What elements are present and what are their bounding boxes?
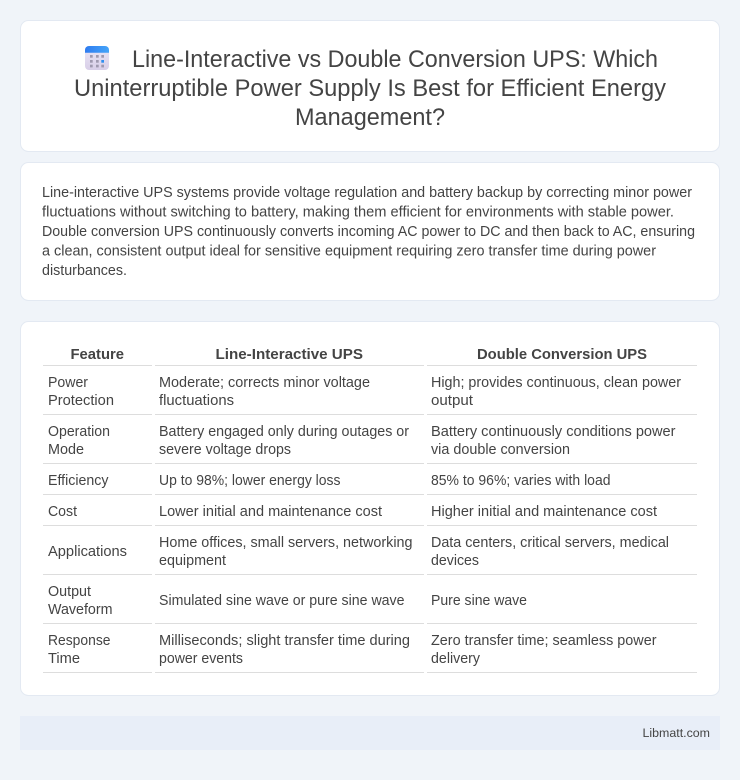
table header: Line-Interactive UPS bbox=[216, 347, 363, 363]
row: operation mode: severe voltage drops bbox=[159, 442, 291, 458]
row: response time: power events bbox=[159, 651, 243, 667]
row: applications: equipment bbox=[159, 553, 226, 569]
table header: Feature bbox=[70, 347, 124, 363]
row: efficiency: Up to 98%; lower energy loss bbox=[159, 473, 340, 489]
row: cost: Lower initial and maintenance cost bbox=[159, 504, 382, 520]
row: operation mode: Battery engaged only during outages or bbox=[159, 424, 409, 440]
text block: summary: Double conversion UPS continuously converts incoming AC power to DC and then back to AC, ensuring bbox=[42, 224, 695, 240]
row: applications bbox=[48, 535, 669, 569]
row: power protection: output bbox=[431, 393, 473, 409]
row: operation mode: Operation bbox=[48, 424, 110, 440]
row: applications: devices bbox=[431, 553, 479, 569]
panel: comparison table bbox=[20, 322, 720, 696]
row: operation mode bbox=[48, 424, 676, 458]
table header bbox=[70, 347, 647, 363]
row: operation mode: Battery continuously conditions power bbox=[431, 424, 676, 440]
row: output waveform: Waveform bbox=[48, 602, 112, 618]
row: cost: Higher initial and maintenance cost bbox=[431, 504, 657, 520]
row: response time: Milliseconds; slight transfer time during bbox=[159, 633, 410, 649]
row: operation mode: via double conversion bbox=[431, 442, 570, 458]
row: output waveform: Pure sine wave bbox=[431, 593, 527, 609]
text block: summary: disturbances. bbox=[42, 263, 127, 279]
row: cost: Cost bbox=[48, 504, 77, 520]
row: power protection bbox=[48, 375, 681, 409]
row: response time bbox=[48, 633, 657, 667]
row: efficiency: 85% to 96%; varies with load bbox=[431, 473, 610, 489]
row: power protection: High; provides continuous, clean power bbox=[431, 375, 681, 391]
text block: summary: Line-interactive UPS systems provide voltage regulation and battery backup by correcting minor power bbox=[42, 185, 692, 201]
row: power protection: fluctuations bbox=[159, 393, 234, 409]
footer bbox=[20, 716, 720, 750]
row: applications: Data centers, critical servers, medical bbox=[431, 535, 669, 551]
row: operation mode: Mode bbox=[48, 442, 84, 458]
footer: Libmatt.com bbox=[642, 726, 710, 740]
row: response time: Time bbox=[48, 651, 80, 667]
table header: Double Conversion UPS bbox=[477, 347, 647, 363]
row: response time: Response bbox=[48, 633, 110, 649]
row: output waveform: Simulated sine wave or pure sine wave bbox=[159, 593, 404, 609]
row: response time: Zero transfer time; seamless power bbox=[431, 633, 657, 649]
row: efficiency bbox=[48, 473, 610, 489]
text block: summary: a clean, consistent output ideal for sensitive equipment requiring zero transfer time during power bbox=[42, 244, 656, 260]
row: cost bbox=[48, 504, 657, 520]
title: Line-Interactive vs Double Conversion UPS: Which bbox=[132, 46, 658, 73]
icon: calendar grid bbox=[85, 46, 109, 70]
row: response time: delivery bbox=[431, 651, 481, 667]
row: power protection: Power bbox=[48, 375, 88, 391]
row: output waveform: Output bbox=[48, 584, 91, 600]
text block: summary: fluctuations without switching to battery, making them efficient for environments with stable power. bbox=[42, 204, 674, 220]
title: Uninterruptible Power Supply Is Best for Efficient Energy bbox=[74, 75, 666, 102]
row: power protection: Protection bbox=[48, 393, 114, 409]
row: power protection: Moderate; corrects minor voltage bbox=[159, 375, 370, 391]
panel: intro paragraph bbox=[20, 162, 720, 300]
title bbox=[74, 46, 666, 131]
row: applications: Applications bbox=[48, 544, 127, 560]
row: output waveform bbox=[48, 584, 527, 618]
panel: title card bbox=[20, 20, 720, 152]
row: applications: Home offices, small servers, networking bbox=[159, 535, 412, 551]
title: Management? bbox=[295, 104, 445, 131]
text block: summary bbox=[42, 185, 695, 279]
row: efficiency: Efficiency bbox=[48, 473, 109, 489]
